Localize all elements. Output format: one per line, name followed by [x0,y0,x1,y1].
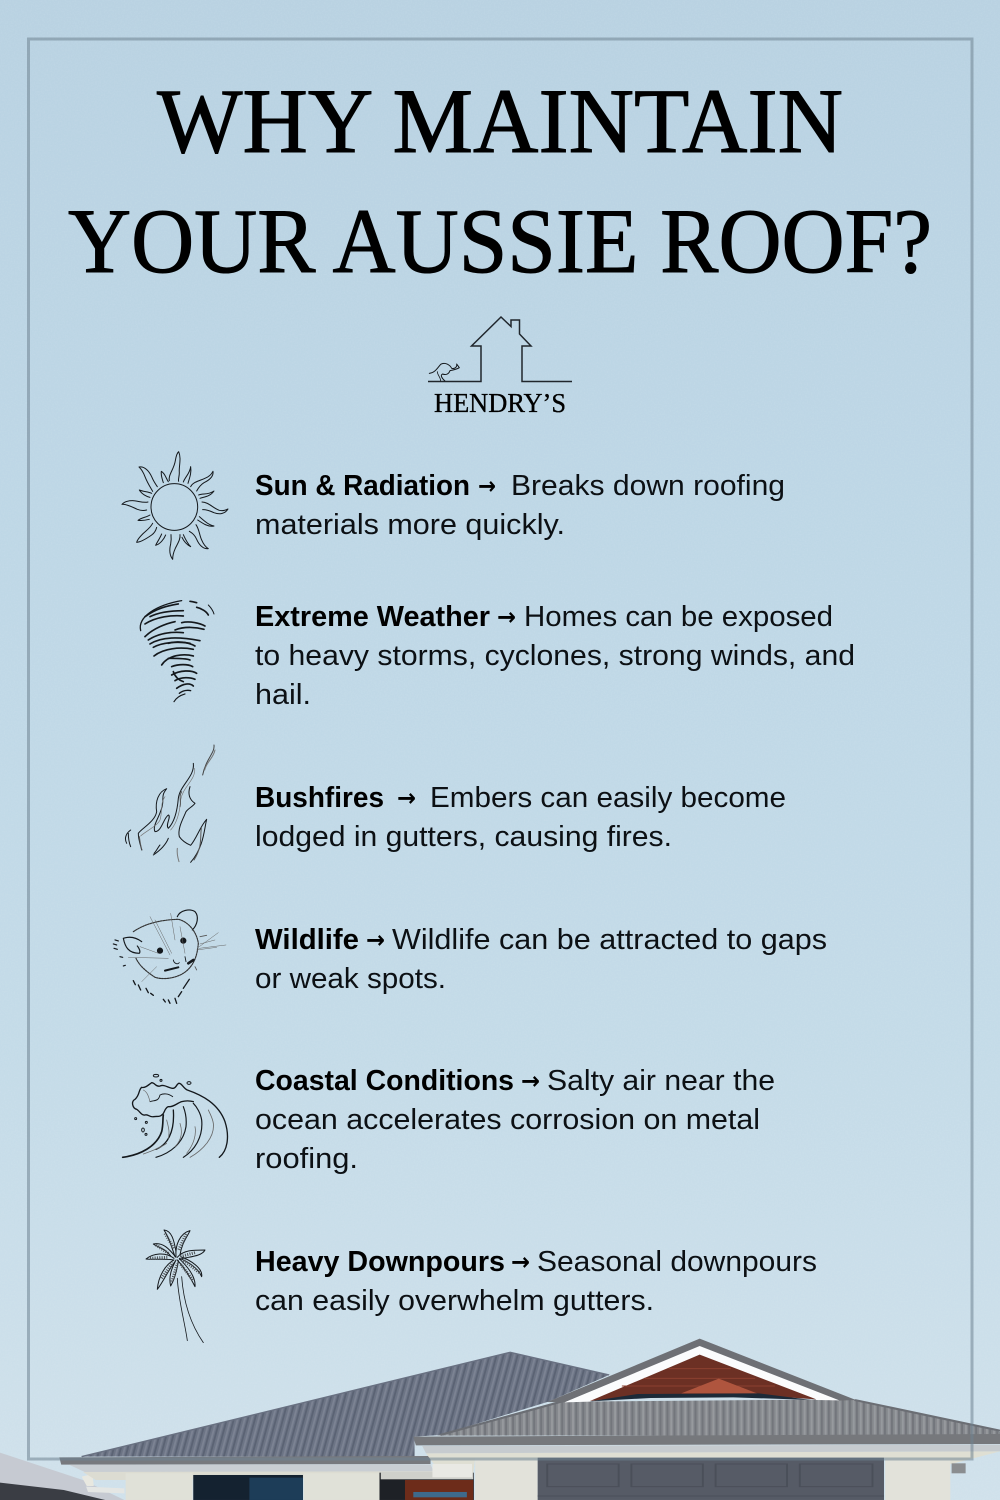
text: extreme weather: to heavy storms, cyclones, strong winds, and [255,640,855,672]
logo house outline [428,317,572,382]
text: wildlife: → [366,926,385,954]
wall and window [126,1472,474,1500]
text: bushfires: Bushfires [255,782,384,814]
text: heavy downpours: → [511,1248,530,1276]
text: coastal conditions: roofing. [255,1143,358,1175]
title [68,70,932,292]
text: wildlife: Wildlife [255,924,359,956]
text: extreme weather [255,601,855,711]
text: wildlife: or weak spots. [255,963,446,995]
text: bushfires: Embers can easily become [430,782,786,814]
icon: wave [123,1074,227,1157]
back hip roof [59,1352,609,1480]
row: wildlife [113,910,827,1003]
neighbouring roof [0,1453,124,1500]
title: WHY MAINTAIN [157,70,843,172]
walls and garage door [475,1458,950,1500]
title: YOUR AUSSIE ROOF? [68,190,932,292]
text: heavy downpours: can easily overwhelm gutters. [255,1285,654,1317]
text: heavy downpours: Seasonal downpours [537,1246,817,1278]
text: coastal conditions: → [521,1067,540,1095]
gutter fittings [432,1463,966,1477]
icon: sun [122,452,228,559]
row: bushfires [125,745,786,862]
icon: possum head [113,910,226,1003]
text: bushfires: → [397,784,416,812]
text: coastal conditions: Coastal Conditions [255,1065,514,1097]
logo wordmark: HENDRY’S [434,388,566,418]
front fascia and soffit [413,1434,1000,1473]
row: sun and radiation [122,452,785,559]
text: sun and radiation: materials more quickly. [255,509,565,541]
row: coastal conditions [123,1065,775,1175]
text: coastal conditions [255,1065,775,1175]
text: sun and radiation: Sun & Radiation [255,470,470,502]
icon: palm tree [146,1230,205,1343]
icon: tornado [140,601,214,702]
text: bushfires: lodged in gutters, causing fires. [255,821,672,853]
text: heavy downpours [255,1246,817,1317]
text: coastal conditions: Salty air near the [547,1065,775,1097]
text: extreme weather: Homes can be exposed [524,601,833,633]
logo: Hendry's [428,317,572,418]
text: sun and radiation [255,470,785,541]
text: heavy downpours: Heavy Downpours [255,1246,505,1278]
row: heavy downpours [146,1230,817,1343]
text: sun and radiation: → [478,472,496,500]
text: extreme weather: hail. [255,679,311,711]
text: wildlife: Wildlife can be attracted to gaps [392,924,827,956]
front roof [437,1399,1000,1436]
text: wildlife [255,924,827,995]
house photo [0,1339,1000,1500]
gable [547,1339,856,1402]
text: coastal conditions: ocean accelerates corrosion on metal [255,1104,760,1136]
text: sun and radiation: Breaks down roofing [511,470,785,502]
row: extreme weather [140,601,855,711]
icon: flames [125,745,215,862]
text: bushfires [255,782,786,853]
text: extreme weather: Extreme Weather [255,601,490,633]
text: extreme weather: → [497,603,516,631]
logo kangaroo [429,363,459,381]
